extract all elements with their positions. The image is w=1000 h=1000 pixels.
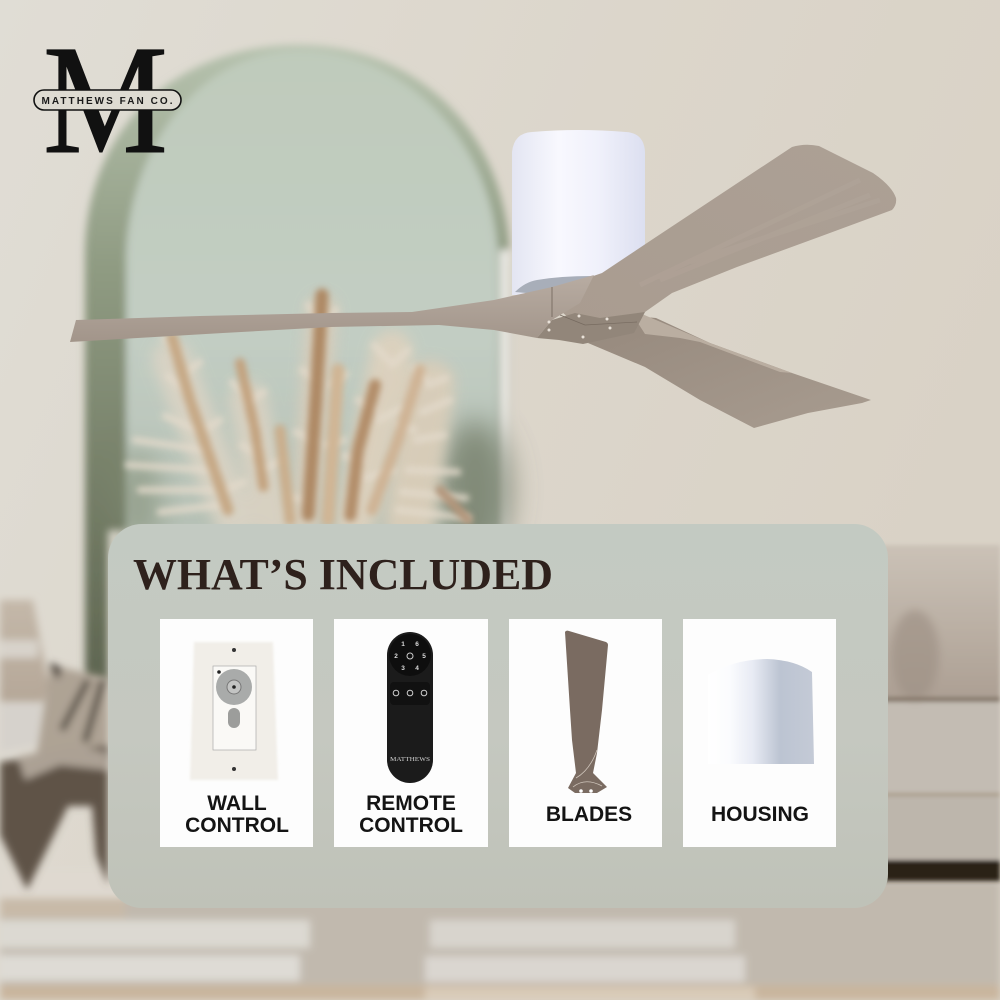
label: wall control: WALL [207,792,267,815]
blurred left sofa and throw [0,600,108,890]
icon: remote control: 1 [401,641,405,648]
icon: blade [565,631,608,793]
logo: Matthews Fan Co.: MATTHEWS FAN CO. [42,96,173,107]
icon: remote control: 2 [394,653,398,660]
card: housing [683,619,836,847]
label: remote control: CONTROL [359,814,463,837]
icon: remote control: MATTHEWS [390,756,430,763]
green arched niche [85,45,511,680]
fan canopy ring [515,276,592,296]
icon: remote control: 3 [401,665,405,672]
icon: wall control [190,642,278,780]
label: housing: HOUSING [711,803,809,826]
pampas grass [128,295,468,520]
left blade [70,275,594,342]
logo: Matthews Fan Co.: M [43,14,168,187]
panel: what's included [108,524,888,908]
blurred right sofa [880,545,1000,881]
blurred floor [0,870,1000,1000]
lower right blade [588,314,871,428]
label: wall control: CONTROL [185,814,289,837]
icon: remote control [387,632,433,783]
label: blades: BLADES [546,803,632,826]
card: blades [509,619,662,847]
ceiling fan [70,130,896,428]
icon: housing [708,659,814,764]
heading: WHAT’S INCLUDED [133,550,553,599]
icon: remote control: 5 [422,653,426,660]
label: remote control: REMOTE [366,792,456,815]
fan hub [537,312,645,344]
card: wall control [160,619,313,847]
icon: remote control: 4 [415,665,419,672]
fan housing [512,130,645,295]
card: remote control [334,619,488,847]
icon: remote control: 6 [415,641,419,648]
upper right blade [553,145,896,338]
